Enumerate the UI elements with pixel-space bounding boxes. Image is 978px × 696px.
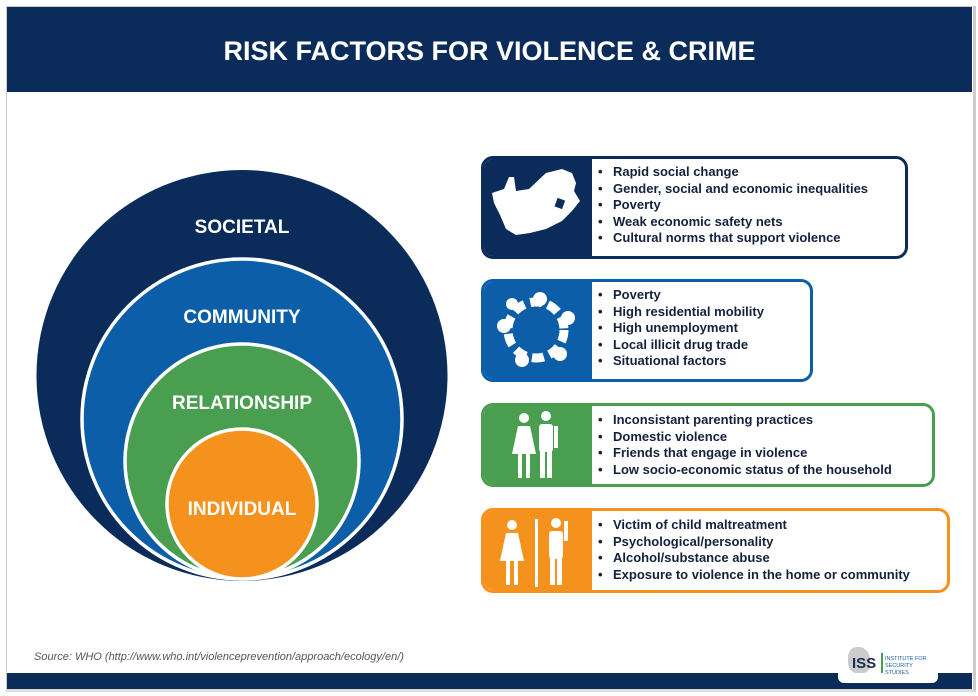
icon: south africa map	[484, 159, 592, 256]
text: relationship factors: Friends that engage in violence	[613, 445, 807, 460]
text: relationship factors: Inconsistant parenting practices	[613, 412, 813, 427]
text: community factors	[598, 287, 764, 368]
icon: individuals	[484, 511, 592, 590]
logo: ISS: SECURITY STUDIES	[885, 663, 913, 676]
logo: ISS: INSTITUTE FOR	[885, 656, 927, 662]
text: community factors: Local illicit drug trade	[613, 336, 748, 352]
text: community factors: High residential mobility	[613, 304, 764, 318]
panel: individual	[481, 508, 950, 593]
logo: ISS: ISS	[852, 655, 876, 672]
text: relationship factors	[598, 412, 892, 476]
circle: societal	[36, 170, 448, 581]
text: societal factors: Gender, social and economic inequalities	[613, 180, 868, 196]
panel: community	[481, 279, 813, 382]
text: individual factors: Exposure to violence in the home or community	[613, 566, 910, 582]
source note: Source: WHO (http://www.who.int/violenceprevention/approach/ecology/en/)	[34, 651, 404, 663]
circle: societal: SOCIETAL	[195, 217, 290, 238]
text: individual factors	[598, 517, 910, 582]
title: RISK FACTORS FOR VIOLENCE & CRIME	[223, 36, 756, 66]
concentric circles diagram	[36, 170, 448, 581]
text: relationship factors: Domestic violence	[613, 428, 727, 444]
text: societal factors: Poverty	[613, 197, 661, 212]
circle: individual: INDIVIDUAL	[188, 499, 297, 520]
circle: community	[82, 259, 402, 579]
text: individual factors: Victim of child maltreatment	[613, 517, 787, 532]
circle: relationship	[125, 344, 359, 578]
circle: community: COMMUNITY	[183, 307, 301, 328]
text: relationship factors: Low socio-economic status of the household	[613, 462, 892, 476]
footer bar	[7, 673, 972, 689]
text: societal factors: Cultural norms that support violence	[613, 230, 841, 245]
text: community factors: High unemployment	[613, 320, 738, 335]
text: individual factors: Alcohol/substance abuse	[613, 550, 770, 565]
circle: relationship: RELATIONSHIP	[172, 393, 312, 414]
icon: community circle	[484, 282, 592, 379]
text: community factors: Situational factors	[613, 353, 726, 368]
header banner	[7, 7, 972, 92]
icon: couple	[484, 406, 592, 484]
text: community factors: Poverty	[613, 287, 661, 302]
text: societal factors	[598, 164, 868, 245]
panel: societal	[481, 156, 908, 259]
text: individual factors: Psychological/personality	[613, 534, 773, 548]
panel: relationship	[481, 403, 935, 487]
text: societal factors: Weak economic safety nets	[613, 214, 783, 228]
circle: individual	[167, 429, 317, 579]
logo: ISS	[838, 643, 938, 683]
text: societal factors: Rapid social change	[613, 164, 739, 179]
